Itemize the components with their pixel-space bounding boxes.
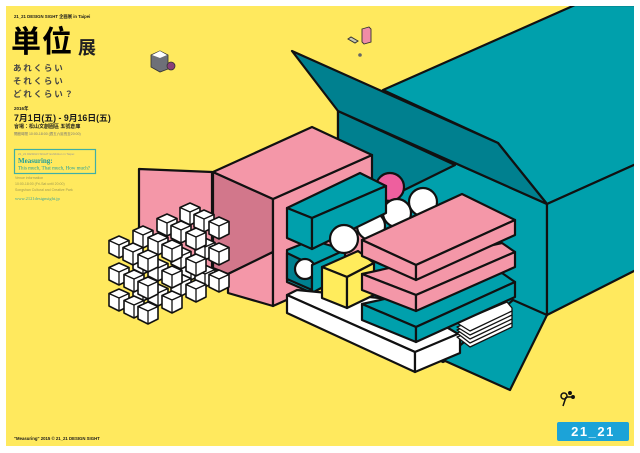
pink box top face [213,127,372,199]
box interior back wall [336,111,456,191]
box top face [383,5,636,204]
website: www.2121designsight.jp [15,196,60,201]
organiser details: Songshan Cultural and Creative Park [15,188,73,192]
cluster of small white cubes [109,203,229,324]
box right face [547,164,636,315]
teal slab [362,273,515,342]
logo: 21_21 [571,424,615,439]
dates and venue: 開館時間 10:00-18:00 (週五六延長至20:00) [14,131,81,136]
icon: small grey cube [151,51,175,72]
box interior [338,111,547,362]
pink slab top [362,194,515,280]
white sphere front [330,225,358,253]
tagline: あれくらい [13,63,65,73]
box bottom flap [443,300,547,390]
title: 単位 [11,25,73,59]
icon: signature mark [561,392,574,406]
pink sphere [376,173,404,201]
yellow cube [322,251,374,308]
box left flap [292,51,547,204]
logo [557,422,629,441]
English title box: Measuring: [18,157,53,165]
pink open box [139,127,372,306]
footer credit: "Measuring" 2015 © 21_21 DESIGN SIGHT [14,436,100,441]
teal block [287,173,386,249]
tagline [13,63,75,99]
tagline: それくらい [13,76,65,86]
white base slab [287,290,460,372]
teal cardboard box [292,5,636,390]
tagline: どれくらい？ [13,89,75,99]
teal open block [287,240,345,293]
English title box: 21_21 DESIGN SIGHT Exhibition in Taipei [18,152,75,156]
dates and venue [14,105,111,136]
dates and venue: 2016年 [14,105,29,112]
English title box: This much, That much, How much? [18,166,91,172]
white spheres row [357,188,437,240]
pink box floor [228,252,273,306]
English title box [14,150,96,174]
pink box right face [273,155,372,306]
pink side flap [139,169,212,270]
icon: small pink bar, chip and dot [348,27,371,57]
header line: 21_21 DESIGN SIGHT 企画展 in Taipei [14,13,90,20]
organiser details: 10:00-18:00 (Fri-Sat until 20:00) [15,182,65,186]
organiser details [15,176,73,192]
title: 展 [78,38,96,58]
dates and venue: 7月1日(五) - 9月16日(五) [14,113,111,123]
pink slab middle [362,243,515,311]
organiser details: Venue information [15,176,43,180]
dates and venue: 會場：松山文創園區 五號倉庫 [14,123,80,130]
stack of paper [457,302,512,347]
pink box inner wall [213,172,273,274]
